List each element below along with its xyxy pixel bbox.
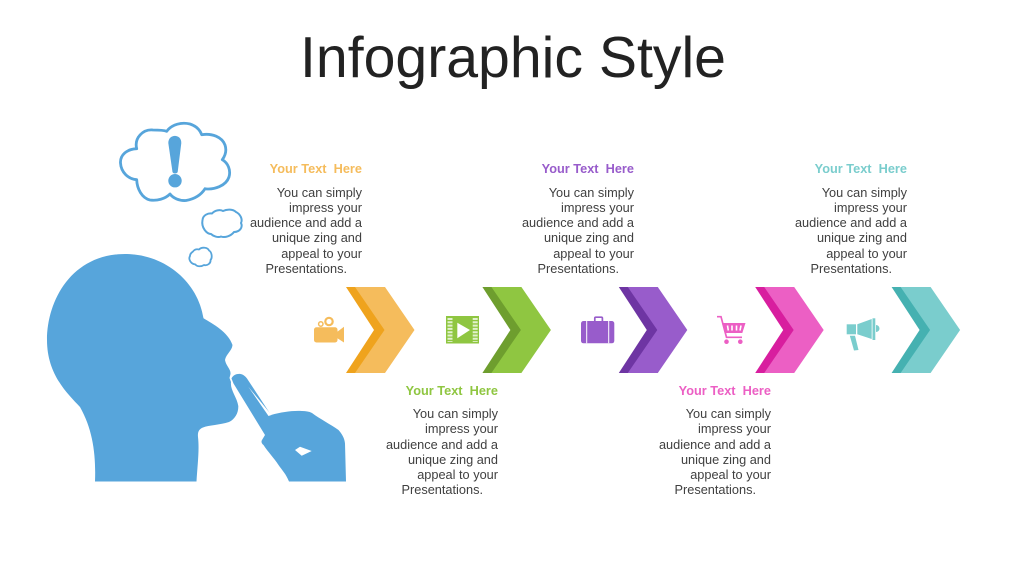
text block 2: unique zing and: [408, 452, 498, 467]
icon: medium thought cloud: [202, 210, 242, 237]
chevron 2: green: [482, 287, 551, 373]
text block 3: unique zing and: [544, 230, 634, 245]
text block 4: You can simply: [686, 406, 771, 421]
text block 4: [659, 383, 771, 497]
title: Infographic Style: [300, 26, 726, 90]
text block 5: unique zing and: [817, 230, 907, 245]
text block 1: appeal to your: [281, 246, 362, 261]
text block 5: [795, 161, 907, 276]
text block 2: impress your: [425, 421, 498, 436]
icon: briefcase: [581, 317, 614, 343]
text block 2: Presentations.: [401, 482, 483, 497]
text block 3: appeal to your: [553, 246, 634, 261]
icon: megaphone: [847, 318, 880, 350]
text block 4: audience and add a: [659, 437, 771, 452]
text block 2: Your Text Here: [406, 383, 498, 398]
icon: large thought cloud: [120, 123, 230, 201]
text block 4: impress your: [698, 421, 771, 436]
chevron 5: teal: [892, 287, 960, 373]
text block 5: appeal to your: [826, 246, 907, 261]
text block 2: audience and add a: [386, 437, 498, 452]
text block 4: appeal to your: [690, 467, 771, 482]
text block 2: You can simply: [413, 406, 498, 421]
icon: hand holding pen: [232, 374, 346, 482]
text block 4: unique zing and: [681, 452, 771, 467]
text block 3: audience and add a: [522, 215, 634, 230]
text block 4: Presentations.: [674, 482, 756, 497]
chevron 3: purple: [619, 287, 687, 373]
icon: small thought cloud: [189, 248, 212, 266]
text block 5: impress your: [834, 200, 907, 215]
text block 3: Presentations.: [537, 261, 619, 276]
icon: film strip: [446, 316, 479, 344]
text block 1: impress your: [289, 200, 362, 215]
text block 4: Your Text Here: [679, 383, 771, 398]
text block 1: unique zing and: [272, 230, 362, 245]
text block 3: impress your: [561, 200, 634, 215]
text block 1: Your Text Here: [270, 161, 362, 176]
chevron 4: pink: [755, 287, 824, 373]
text block 5: Your Text Here: [815, 161, 907, 176]
text block 5: Presentations.: [810, 261, 892, 276]
text block 3: You can simply: [549, 184, 634, 200]
text block 5: You can simply: [822, 184, 907, 200]
icon: head silhouette: [47, 254, 238, 482]
text block 2: appeal to your: [417, 467, 498, 482]
text block 1: You can simply: [277, 184, 362, 200]
text block 3: Your Text Here: [542, 161, 634, 176]
text block 5: audience and add a: [795, 215, 907, 230]
icon: video camera: [314, 318, 344, 342]
icon: exclamation mark: [168, 136, 181, 174]
icon: shopping cart: [717, 317, 746, 344]
text block 1: Presentations.: [265, 261, 347, 276]
text block 1: [250, 161, 362, 276]
chevron 1: orange: [346, 287, 414, 373]
text block 2: [386, 383, 498, 497]
text block 3: [522, 161, 634, 276]
text block 1: audience and add a: [250, 215, 362, 230]
